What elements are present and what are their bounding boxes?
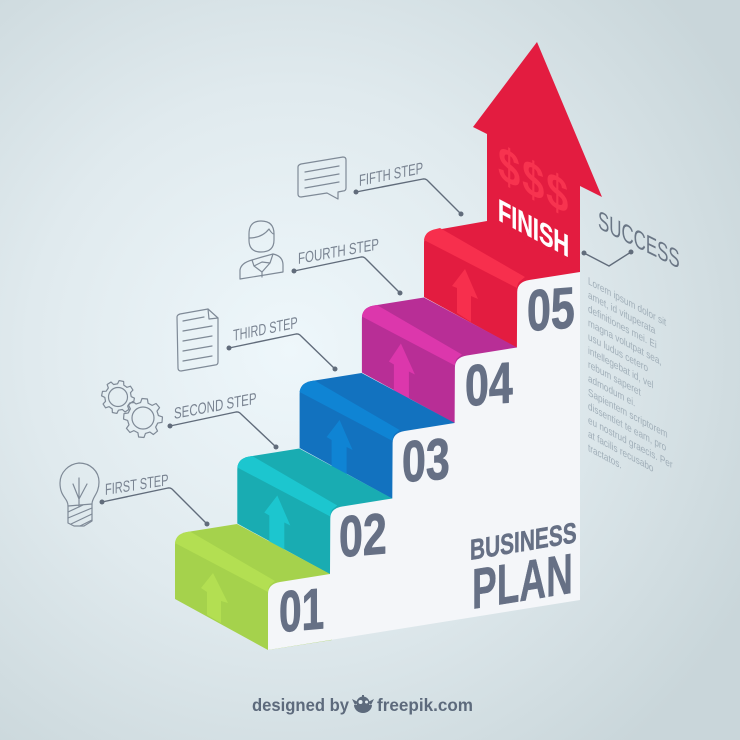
lorem ipsum paragraph: amet, id vituperata: [588, 289, 656, 338]
third step callout: [177, 309, 338, 372]
footer credit: [252, 695, 473, 715]
step 5: red with arrow: [424, 42, 602, 348]
designed by: designed by: [252, 695, 349, 715]
third step leader line: [226, 334, 338, 372]
fifth step label: FIFTH STEP: [359, 158, 423, 189]
lorem ipsum paragraph: eu nostrud graecis. Per: [588, 415, 673, 472]
step numbers: [279, 275, 575, 645]
lorem ipsum paragraph: magna volutpat sea,: [588, 317, 662, 369]
lorem ipsum paragraph: intellegebat id, vel: [588, 345, 653, 392]
fifth step callout: [298, 157, 464, 216]
red step block: [424, 221, 580, 348]
success label: SUCCESS: [598, 204, 680, 275]
second step leader line: [168, 412, 278, 450]
number 04: 04: [465, 350, 513, 418]
icon: light bulb: [60, 463, 99, 526]
red step arrow: [452, 269, 478, 322]
success callout: [582, 204, 680, 275]
first step label: FIRST STEP: [105, 471, 169, 498]
second step callout: [99, 378, 278, 450]
icon: speech bubble: [298, 157, 346, 199]
dollar signs: $$$: [498, 134, 570, 226]
step 4: magenta: [362, 298, 519, 424]
lorem ipsum paragraph: definitiones mei. Ei: [588, 303, 657, 352]
business plan title: [470, 517, 577, 622]
first step leader line: [100, 488, 210, 526]
icon: person: [240, 221, 283, 279]
icon: document: [177, 309, 218, 371]
number 03: 03: [402, 426, 450, 494]
white stair front: [268, 272, 580, 650]
icon: gears: [99, 378, 164, 439]
step 2: teal: [237, 448, 394, 574]
red arrow head and shaft: [473, 42, 602, 300]
lorem ipsum paragraph: dissentiet te eam, pro: [588, 401, 667, 455]
number 02: 02: [339, 501, 387, 569]
freepik.com: freepik.com: [377, 695, 473, 715]
third step label: THIRD STEP: [233, 314, 298, 344]
business: BUSINESS: [470, 517, 577, 567]
first step callout: [60, 463, 210, 526]
lorem ipsum paragraph: at facilis recusabo: [588, 428, 654, 476]
second step label: SECOND STEP: [174, 389, 257, 422]
plan: PLAN: [472, 542, 573, 622]
lorem ipsum paragraph: Lorem ipsum dolor sit: [588, 276, 666, 329]
lorem ipsum paragraph: usu ludus cetero: [588, 331, 648, 375]
lorem ipsum paragraph: admodum ei.: [588, 373, 635, 410]
fifth step leader line: [354, 179, 464, 216]
fourth step leader line: [292, 257, 402, 296]
number 05: 05: [527, 275, 575, 343]
step 1: green: [175, 524, 332, 650]
lorem ipsum paragraph: Sapientem scriptorem: [588, 387, 668, 441]
lorem ipsum paragraph: rebum saperet: [588, 359, 641, 399]
finish label: FINISH: [498, 192, 569, 264]
red step highlight band: [424, 228, 525, 288]
step 3: blue: [300, 373, 457, 499]
fourth step label: FOURTH STEP: [298, 235, 379, 267]
fourth step callout: [240, 221, 402, 296]
lorem ipsum paragraph: tractatos.: [588, 442, 622, 472]
icon: freepik mascot: [352, 695, 374, 713]
success connector: [582, 250, 634, 266]
number 01: 01: [279, 576, 324, 645]
